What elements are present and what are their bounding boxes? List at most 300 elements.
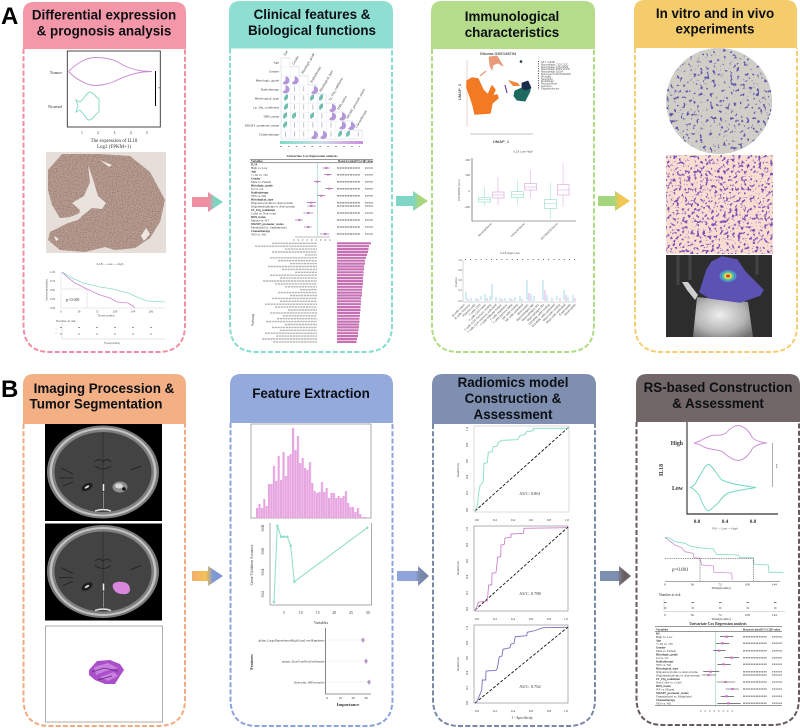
UMAP plot: Macrophage C1Q C1QC	[541, 63, 569, 66]
forest plot: univariate Cox regression: Methylated vs. Unmethylated	[251, 226, 287, 230]
violin plot: IL18 expression tumor vs normal: Tumor	[50, 70, 62, 75]
arrow: A1 to A2	[192, 192, 223, 212]
box plot: immune cell fractions: Dendritic cells activated	[531, 303, 556, 328]
forest plot: RS univariate Cox regression: Histological_type	[656, 666, 679, 670]
forest plot: RS univariate Cox regression: Hazard ratio(95%CI)	[743, 628, 771, 632]
forest plot: RS univariate Cox regression: YES vs. NO	[656, 701, 672, 705]
bar chart: enriched pathways	[251, 243, 371, 342]
ROC curve: AUC 0.861: 0.0	[475, 518, 479, 522]
box plot: immune cell fractions	[451, 251, 577, 334]
heading: RS-based construction: RS-based Construction	[644, 380, 792, 395]
box plot: immune cell fractions: T cells regulatory	[489, 303, 508, 322]
violin plot: RS by IL18 group: High	[671, 441, 684, 447]
UMAP plot: Macrophage SPP1 VCAN	[541, 68, 570, 71]
forest plot: univariate Cox regression: IL18	[251, 162, 258, 166]
ROC curve: AUC 0.788: 0.4	[511, 617, 515, 621]
forest plot: univariate Cox regression: Chemotherapy	[251, 229, 271, 233]
forest plot: univariate Cox regression: High vs. Low	[251, 166, 268, 170]
histogram	[251, 424, 371, 518]
ROC curve: AUC 0.861: 0.2	[493, 518, 497, 522]
line chart: cross-validation accuracy: Variables	[314, 621, 329, 625]
forest plot: univariate Cox regression: Male vs. Female	[251, 180, 272, 184]
forest plot: RS univariate Cox regression: High vs. Low	[656, 635, 673, 639]
arrow: B3 to B4	[600, 566, 631, 586]
box plot: immune cell fractions: Neutrophils	[563, 303, 577, 316]
violin plot: IL18 expression tumor vs normal: 5	[146, 131, 148, 135]
violin plot: RS by IL18 group: RS — Low — High	[712, 526, 738, 530]
forest plot: univariate Cox regression	[250, 154, 374, 240]
violin plot: RS by IL18 group	[659, 422, 780, 530]
panel A4 header	[634, 0, 797, 48]
correlation matrix: Radiotherapy	[309, 65, 322, 84]
ROC curve: AUC 0.788	[456, 526, 568, 621]
box plot: immune cell fractions: 1.0	[458, 258, 463, 262]
panel A4 dashed frame	[635, 48, 797, 352]
forest plot: RS univariate Cox regression: >= 65 vs. <65	[656, 642, 673, 646]
forest plot: RS univariate Cox regression: YES vs. NO	[656, 663, 672, 667]
survival curve: IL18 low vs high: 72	[96, 310, 99, 314]
survival curve: RS low vs high: p=0.001	[672, 568, 689, 573]
ROC curve: AUC 0.788: Sensitivity	[456, 560, 460, 575]
ROC curve: AUC 0.861: 0.0	[465, 508, 469, 512]
ROC curve: AUC 0.861: 0.8	[547, 518, 551, 522]
violin plot: IL18 expression tumor vs normal	[48, 51, 160, 150]
ROC curve: AUC 0.762: 0.4	[511, 709, 515, 713]
survival curve: IL18 low vs high: p<0.001	[66, 297, 80, 302]
ROC curve: AUC 0.762: Sensitivity	[456, 656, 460, 671]
correlation matrix: Histologic_grade	[256, 78, 279, 82]
survival curve: IL18 low vs high: 0.25	[50, 297, 56, 301]
ROC curve: AUC 0.762: 1.0	[465, 626, 469, 630]
survival curve: RS low vs high: 108	[745, 582, 750, 586]
forest plot: univariate Cox regression: P value	[364, 159, 374, 163]
survival curve: IL18 low vs high	[44, 262, 165, 345]
forest plot: RS univariate Cox regression: Univariate Cox Regression analysis	[689, 622, 747, 626]
forest plot: RS univariate Cox regression: Histologic_grade	[656, 652, 678, 656]
box plot: immune scores	[457, 150, 576, 241]
forest plot: RS univariate Cox regression: Oligodendroglioma vs. Astrocytoma	[656, 673, 700, 677]
UMAP plot: Pericyte/Mural	[541, 83, 557, 86]
UMAP plot: Astrocyte	[541, 85, 552, 88]
line chart: cross-validation accuracy: 0.64	[261, 569, 265, 575]
UMAP plot: UMAP_1	[493, 139, 510, 144]
ROC curve: AUC 0.861: AUC: 0.861	[519, 491, 541, 496]
forest plot: RS univariate Cox regression: Non-Codel vs. Codel	[656, 680, 682, 684]
box plot: immune scores: -200	[464, 205, 470, 209]
forest plot: RS univariate Cox regression: P value	[771, 628, 781, 632]
box plot: immune scores: StromalScore	[477, 222, 493, 238]
arrow: A2 to A3	[396, 191, 428, 211]
box plot: immune cell fractions: 0.8	[458, 268, 463, 272]
importance dot plot: 10	[339, 696, 342, 700]
correlation matrix: Histological_type	[255, 96, 279, 100]
correlation matrix: Histologic_grade	[300, 52, 316, 74]
ROC curve: AUC 0.788: 0.2	[493, 617, 497, 621]
survival curve: IL18 low vs high: Number at risk	[56, 319, 76, 323]
violin plot: RS by IL18 group: 0.8	[750, 519, 757, 525]
survival curve: RS low vs high: 36	[691, 582, 694, 586]
correlation matrix: 1p_19q_codeletion	[327, 77, 344, 102]
forest plot: univariate Cox regression: >= 65 vs. <65	[251, 173, 268, 177]
heading: immunological: characteristics	[465, 25, 559, 40]
forest plot: RS univariate Cox regression: 1P_19q_codeletion	[656, 677, 680, 681]
ROC curve: AUC 0.788: 1.0	[564, 617, 568, 621]
line chart: cross-validation accuracy: Cross-Validation Accuracy	[250, 544, 254, 585]
ROC curve: AUC 0.788: AUC: 0.788	[519, 591, 542, 596]
forest plot: univariate Cox regression: Hazard ratio(95%CI)	[338, 159, 365, 163]
colony plate image	[666, 48, 772, 154]
forest plot: univariate Cox regression: G4 vs. G3	[251, 187, 264, 191]
ROC curve: AUC 0.788: 0.8	[547, 617, 551, 621]
survival curve: RS low vs high: 72	[718, 613, 722, 617]
ROC curve: AUC 0.861: 1.0	[465, 427, 469, 431]
importance dot plot: Importance	[337, 702, 359, 707]
violin plot: RS by IL18 group: ***	[774, 463, 780, 468]
correlation matrix: Gender	[269, 70, 280, 74]
box plot: immune cell fractions: Macrophages M2	[526, 303, 545, 322]
box plot: immune cell fractions: 0.4	[458, 288, 463, 292]
correlation matrix: IDH_status	[336, 95, 348, 110]
survival curve: IL18 low vs high: 1.00	[50, 270, 56, 274]
box plot: immune cell fractions: Fraction	[454, 277, 458, 287]
forest plot: univariate Cox regression: YES vs. NO	[251, 232, 267, 236]
survival curve: IL18 low vs high: 0	[60, 310, 62, 314]
line chart: cross-validation accuracy: 0.62	[261, 591, 265, 597]
ROC curve: AUC 0.762: 1.0	[564, 709, 568, 713]
importance dot plot: 30	[364, 696, 368, 700]
forest plot: univariate Cox regression: Histologic_grade	[251, 184, 273, 188]
correlation matrix: Radiotherapy	[261, 88, 279, 92]
survival curve: IL18 low vs high: 144	[131, 310, 136, 314]
panel B4 dashed frame	[636, 422, 799, 725]
survival curve: IL18 low vs high: 36	[78, 310, 81, 314]
box plot: immune scores: ESTIMATEScore	[540, 222, 559, 241]
arrow: B2 to B3	[397, 566, 429, 586]
forest plot: univariate Cox regression: Codel vs. Non-codel	[251, 212, 276, 216]
correlation matrix	[245, 49, 368, 146]
ROC curve: AUC 0.788: 0.2	[465, 591, 469, 595]
violin plot: RS by IL18 group: Low	[672, 486, 684, 492]
correlation matrix: 1p_19q_codeletion	[253, 106, 279, 110]
violin plot: RS by IL18 group: IL18	[659, 464, 665, 476]
panel: clinical features and biological functions	[229, 1, 393, 352]
heading: in vitro and in vivo: experiments	[676, 22, 754, 36]
forest plot: univariate Cox regression: Radiotherapy	[251, 190, 269, 194]
heading: radiomics model: Radiomics model	[458, 375, 568, 390]
heading: clinical features: Biological functions	[248, 23, 376, 38]
box plot: immune cell fractions: IL18 High Low	[500, 251, 520, 255]
box plot: immune scores: ESTIMATE score	[457, 179, 461, 201]
box plot: immune scores: 200	[465, 173, 470, 177]
ROC curve: AUC 0.788: 0.6	[465, 559, 469, 563]
ROC curve: AUC 0.861: 0.4	[465, 475, 469, 479]
forest plot: RS univariate Cox regression: Oligoastrocytoma vs. Astrocytoma	[656, 670, 698, 674]
survival curve: RS low vs high: 0	[664, 613, 666, 617]
ROC curve: AUC 0.788: 1.0	[465, 527, 469, 531]
ROC curve: AUC 0.861	[456, 426, 569, 522]
box plot: immune cell fractions: Mast cells activated	[545, 303, 567, 324]
forest plot: RS univariate Cox regression	[655, 622, 782, 711]
violin plot: IL18 expression tumor vs normal: *	[158, 86, 160, 91]
ROC curve: AUC 0.788: 0.0	[465, 607, 469, 611]
heading: feature extraction: Feature Extraction	[252, 386, 370, 401]
panel B2 dashed frame	[230, 423, 392, 726]
box plot: immune cell fractions: T cells CD4 memory resting	[463, 303, 492, 332]
forest plot: univariate Cox regression: Mutant vs. WT	[251, 218, 269, 222]
box plot: immune cell fractions: Monocytes	[516, 303, 530, 316]
violin plot: IL18 expression tumor vs normal: 4	[130, 131, 132, 135]
violin plot: RS by IL18 group: 0.4	[722, 519, 729, 525]
importance dot plot: glszm_SizeZoneNonUniformity	[282, 660, 325, 664]
heading: imaging procession: Imaging Procession &	[34, 381, 175, 396]
ROC curve: AUC 0.788: 0.8	[465, 543, 469, 547]
forest plot: univariate Cox regression: Histological_type	[251, 198, 274, 202]
forest plot: univariate Cox regression: MGMT_promoter_status	[251, 222, 284, 226]
box plot: immune cell fractions: Macrophages M0	[515, 303, 535, 322]
importance dot plot	[249, 628, 371, 707]
line chart: cross-validation accuracy: 15	[316, 611, 320, 615]
line chart: cross-validation accuracy: 10	[299, 611, 303, 615]
panel B3 header	[432, 374, 596, 424]
bioluminescence mouse image	[666, 255, 772, 337]
ROC curve: AUC 0.762: 0.0	[475, 709, 479, 713]
box plot: immune cell fractions: Macrophages M1	[521, 303, 540, 322]
panel B3 dashed frame	[433, 424, 595, 726]
survival curve: RS low vs high: Time(months)	[711, 586, 731, 590]
correlation matrix: Chemotherapy	[259, 132, 279, 136]
ROC curve: AUC 0.861: 0.2	[465, 491, 469, 495]
box plot: immune scores: ImmuneScore	[510, 222, 526, 238]
heading: immunological: Immunological	[465, 9, 559, 24]
box plot: immune cell fractions: 0.0	[458, 299, 463, 303]
ROC curve: AUC 0.762: 0.2	[465, 686, 469, 690]
survival curve: IL18 low vs high: IL18 — Low — High	[97, 262, 124, 266]
survival curve: RS low vs high: 144	[772, 582, 777, 586]
box plot: immune cell fractions: T cells gamma delta	[492, 303, 514, 325]
bar chart: enriched pathways: Pathway	[251, 313, 255, 326]
panel: feature extraction	[230, 374, 393, 726]
forest plot: RS univariate Cox regression: Male vs. Female	[656, 649, 677, 653]
panel B2 header	[230, 374, 393, 423]
panel A1 header	[23, 2, 186, 49]
heading: radiomics model: Construction &	[465, 391, 562, 406]
line chart: cross-validation accuracy: 5	[283, 611, 285, 615]
box plot: immune cell fractions: Eosinophils	[558, 303, 572, 317]
survival curve: RS low vs high: Time(months)	[711, 617, 731, 621]
panel: radiomics model construction and assessment	[432, 374, 596, 726]
forest plot: RS univariate Cox regression: MGMT_promoter_status	[656, 691, 689, 695]
UMAP plot: Microglia	[541, 75, 552, 78]
survival curve: RS low vs high: 0	[664, 582, 666, 586]
violin plot: IL18 expression tumor vs normal: 3	[114, 131, 116, 135]
violin plot: IL18 expression tumor vs normal: 1	[81, 131, 83, 135]
forest plot: RS univariate Cox regression: Unmethylated vs. Methylated	[656, 694, 692, 698]
ROC curve: AUC 0.762	[456, 625, 568, 720]
box plot: immune cell fractions: T cells follicular helper	[479, 303, 503, 327]
survival curve: RS low vs high: 144	[772, 613, 777, 617]
survival curve: RS low vs high: Number at risk	[659, 593, 681, 597]
panel: in vitro and in vivo experiments	[634, 0, 797, 352]
ROC curve: AUC 0.762: 0.2	[493, 709, 497, 713]
survival curve: IL18 low vs high: 0.75	[50, 279, 56, 283]
stained cells image	[666, 155, 773, 254]
UMAP plot: Monocyte FCN1/S100A8/9	[541, 73, 571, 76]
UMAP plot: Macrophage C1Q APOE	[541, 66, 569, 69]
label: panel B: B	[1, 376, 18, 403]
panel A1 dashed frame	[24, 49, 185, 352]
ROC curve: AUC 0.762: 0.6	[529, 709, 533, 713]
forest plot: univariate Cox regression: YES vs. NO	[251, 194, 267, 198]
survival curve: IL18 low vs high: 0.50	[50, 288, 56, 292]
box plot: immune scores: 0	[468, 189, 470, 193]
violin plot: IL18 expression tumor vs normal: The expression of IL18	[91, 139, 138, 144]
violin plot: RS by IL18 group: 0.0	[694, 519, 701, 525]
survival curve: IL18 low vs high: 180	[149, 310, 154, 314]
forest plot: RS univariate Cox regression: RS	[656, 631, 660, 635]
MRI slice with tumor	[45, 424, 162, 521]
ROC curve: AUC 0.762: 1 - Specificity	[511, 716, 533, 720]
correlation matrix: MGMT_promoter_status	[245, 124, 280, 128]
forest plot: univariate Cox regression: Variables	[251, 159, 263, 163]
label: panel A: A	[1, 3, 18, 30]
panel: immunological characteristics	[431, 1, 595, 352]
line chart: cross-validation accuracy	[250, 523, 372, 625]
ROC curve: AUC 0.762: 0.6	[465, 656, 469, 660]
correlation matrix: IDH_status	[264, 114, 280, 118]
heading: clinical features: Clinical features &	[254, 7, 371, 22]
line chart: cross-validation accuracy: 30	[366, 611, 370, 615]
arrow: B1 to B2	[192, 566, 223, 586]
arrow: A3 to A4	[598, 191, 630, 211]
UMAP plot: UMAP_2	[457, 83, 462, 100]
survival curve: RS low vs high	[659, 537, 785, 621]
survival curve: IL18 low vs high: Survival probability	[44, 278, 48, 301]
line chart: cross-validation accuracy: 25	[349, 611, 353, 615]
survival curve: RS low vs high: 108	[745, 613, 750, 617]
correlation matrix: Age	[282, 49, 289, 56]
panel B1 dashed frame	[24, 424, 185, 726]
forest plot: univariate Cox regression: Oligoastrocytoma vs. Astrocytoma	[251, 201, 293, 205]
box plot: immune cell fractions: NK cells resting	[501, 303, 519, 320]
panel: RS-based construction and assessment	[636, 374, 800, 725]
ROC curve: AUC 0.788: 0.0	[475, 617, 479, 621]
importance dot plot: firstorder_90Percentile	[294, 680, 325, 684]
heading: differential expression: Differential expression	[32, 8, 176, 22]
panel B1 header	[23, 374, 186, 424]
box plot: immune cell fractions: T cells CD4 memory activated	[466, 303, 498, 334]
forest plot: RS univariate Cox regression: IDH_status	[656, 684, 672, 688]
panel A3 header	[431, 1, 595, 49]
ROC curve: AUC 0.861: 1.0	[565, 518, 569, 522]
box plot: immune cell fractions: B cells naive	[451, 303, 466, 318]
survival curve: RS low vs high: 36	[691, 613, 694, 617]
ROC curve: AUC 0.762: 0.4	[465, 671, 469, 675]
correlation matrix: Age	[273, 60, 279, 64]
panel: imaging procession and tumor segmentation	[23, 374, 186, 726]
box plot: immune cell fractions: NK cells activated	[504, 303, 524, 323]
MRI slice with tumor mask	[45, 524, 162, 620]
heading: RS-based construction: & Assessment	[672, 396, 764, 411]
UMAP plot: Glioma GSE138794	[480, 51, 517, 56]
forest plot: RS univariate Cox regression: G4 vs. G3	[656, 656, 669, 660]
ROC curve: AUC 0.762: 0.8	[547, 709, 551, 713]
heading: differential expression: & prognosis analysis	[37, 24, 171, 38]
panel B4 header	[636, 374, 800, 422]
forest plot: RS univariate Cox regression: Chemotherapy	[656, 698, 676, 702]
ROC curve: AUC 0.861: 0.6	[529, 518, 533, 522]
forest plot: univariate Cox regression: Gender	[251, 176, 261, 180]
ROC curve: AUC 0.861: Sensitivity	[456, 462, 460, 477]
forest plot: univariate Cox regression: 1P_19q_codeletion	[251, 208, 275, 212]
box plot: immune cell fractions: B cells memory	[454, 303, 471, 320]
UMAP plot	[457, 51, 571, 144]
survival curve: IL18 low vs high: 108	[113, 310, 118, 314]
heading: radiomics model: Assessment	[474, 407, 553, 422]
importance dot plot: Features	[249, 654, 254, 670]
line chart: cross-validation accuracy: 0.68	[261, 525, 265, 531]
line chart: cross-validation accuracy: 20	[332, 611, 336, 615]
3D tumor segmentation	[46, 626, 162, 722]
forest plot: RS univariate Cox regression: WT vs. Mutant	[656, 687, 674, 691]
violin plot: IL18 expression tumor vs normal: Normal	[48, 104, 63, 109]
box plot: immune scores: IL18 Low High	[513, 150, 533, 154]
box plot: immune scores: 400	[465, 158, 470, 162]
panel A3 dashed frame	[432, 49, 594, 352]
ROC curve: AUC 0.762: AUC: 0.762	[519, 684, 541, 689]
violin plot: IL18 expression tumor vs normal: 2	[97, 131, 99, 135]
forest plot: univariate Cox regression: IDH_status	[251, 215, 267, 219]
box plot: immune cell fractions: T cells CD4 naive	[467, 303, 487, 322]
forest plot: RS univariate Cox regression: Age	[656, 638, 662, 642]
correlation matrix: Histological_type	[318, 69, 334, 92]
panel A2 dashed frame	[230, 48, 392, 352]
tissue section image	[46, 152, 166, 253]
forest plot: RS univariate Cox regression: Variables	[656, 628, 669, 632]
ROC curve: AUC 0.861: 0.4	[511, 518, 515, 522]
forest plot: RS univariate Cox regression: Radiotherapy	[656, 659, 674, 663]
forest plot: RS univariate Cox regression: Gender	[656, 645, 666, 649]
line chart: cross-validation accuracy: 0.66	[261, 548, 265, 554]
ROC curve: AUC 0.762: 0.0	[465, 701, 469, 705]
importance dot plot: gldm_LargeDependenceHighGrayLevelEmphasis	[259, 638, 325, 642]
box plot: immune cell fractions: Dendritic cells resting	[528, 303, 551, 326]
forest plot: univariate Cox regression: Univariate Cox Regression analysis	[286, 154, 338, 158]
box plot: immune cell fractions: Mast cells resting	[542, 303, 561, 322]
ROC curve: AUC 0.861: 0.6	[465, 459, 469, 463]
ROC curve: AUC 0.788: 0.6	[529, 617, 533, 621]
survival curve: RS low vs high: 72	[718, 582, 722, 586]
panel: differential expression and prognosis analysis	[23, 2, 186, 352]
panel A2 header	[229, 1, 393, 48]
heading: in vitro and in vivo: In vitro and in vivo	[656, 6, 774, 21]
UMAP plot: NK T cell/NK	[541, 61, 556, 64]
survival curve: IL18 low vs high: 0.00	[50, 306, 56, 310]
ROC curve: AUC 0.762: 0.8	[465, 641, 469, 645]
survival curve: IL18 low vs high: Time(months)	[97, 314, 115, 318]
box plot: immune cell fractions: T cells CD8	[468, 303, 482, 317]
correlation matrix: Chemotherapy	[354, 109, 368, 128]
forest plot: univariate Cox regression: Oligodendroglioma vs. Astrocytoma	[251, 204, 295, 208]
importance dot plot: 0	[326, 696, 328, 700]
heading: imaging procession: Tumor Segmentation	[30, 396, 162, 412]
correlation matrix: MGMT_promoter_status	[345, 87, 366, 120]
box plot: immune cell fractions: 0.6	[458, 278, 463, 282]
ROC curve: AUC 0.861: 0.8	[465, 443, 469, 447]
box plot: immune cell fractions: Plasma cells	[462, 303, 477, 318]
UMAP plot: Macrophage S100A	[541, 71, 563, 74]
violin plot: IL18 expression tumor vs normal: Log2 (FPKM+1)	[97, 145, 131, 150]
importance dot plot: 20	[352, 696, 355, 700]
